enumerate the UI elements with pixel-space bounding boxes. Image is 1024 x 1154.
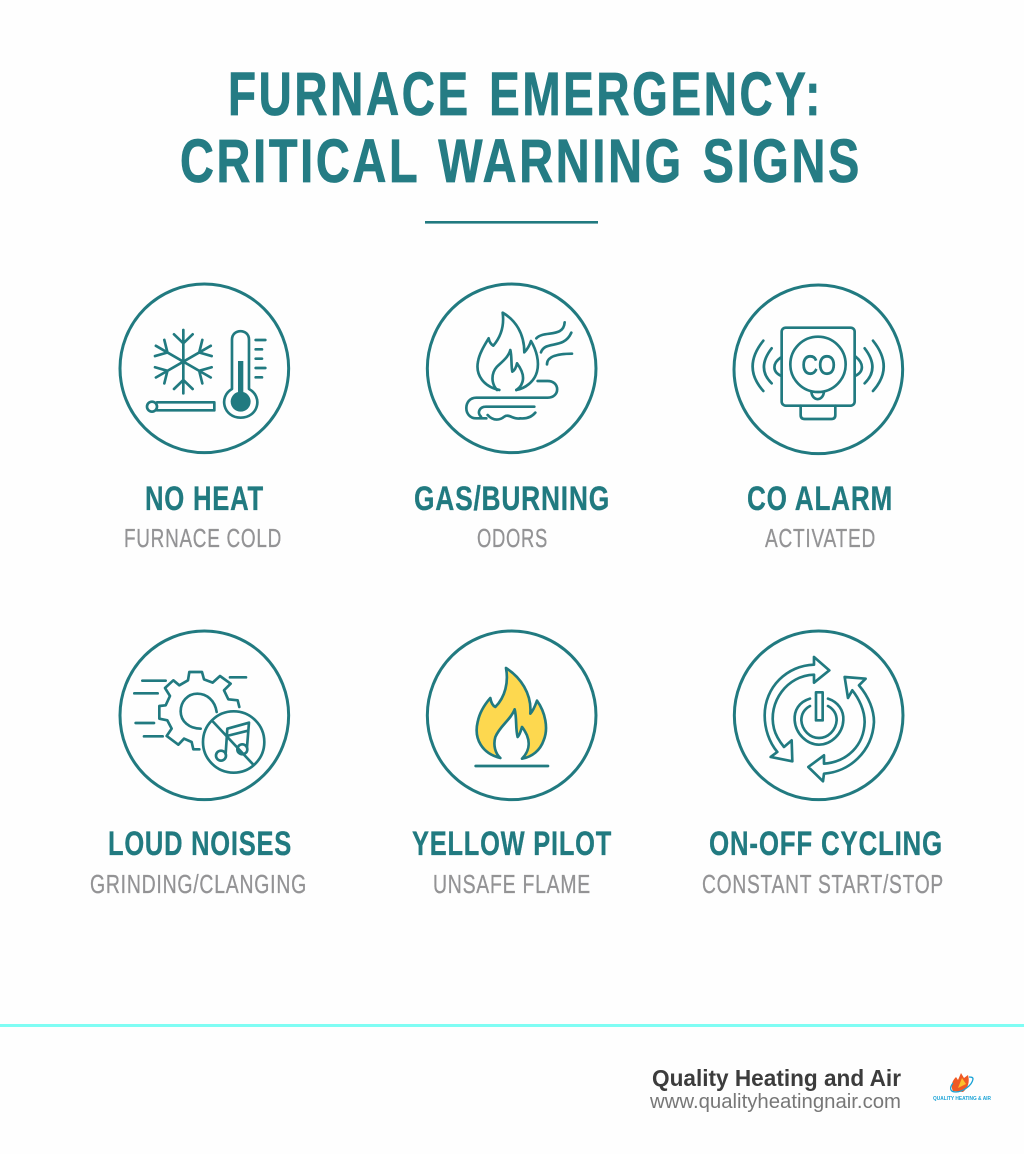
footer logo: QUALITY HEATING & AIR [933,1096,991,1102]
heading: co alarm: CO ALARM [747,480,893,518]
icon: snowflake and thermometer [120,284,289,453]
subtext: grinding/clanging: GRINDING/CLANGING [90,869,307,899]
panel: on-off cycling [702,631,944,899]
subtext: unsafe flame: UNSAFE FLAME [433,869,591,899]
panel: loud noises [90,631,307,899]
icon: gear with crossed music note [120,631,289,800]
heading: gas/burning: GAS/BURNING [414,480,610,518]
heading: yellow pilot: YELLOW PILOT [412,825,612,863]
footer: company name and website [649,1065,901,1113]
subtext: constant start/stop: CONSTANT START/STOP [702,869,944,899]
subtext: odors: ODORS [477,523,548,553]
panel: yellow pilot [412,631,612,899]
icon: carbon monoxide alarm [734,285,903,454]
title [180,60,862,195]
subtext: furnace cold: FURNACE COLD [124,523,282,553]
title: FURNACE EMERGENCY: [228,60,823,128]
heading: no heat: NO HEAT [145,480,264,518]
footer: company name and website: Quality Heating and Air [652,1065,901,1091]
footer: company name and website: www.qualityheatingnair.com [649,1091,901,1113]
panel: co alarm [734,285,903,553]
icon: power symbol with cycling arrows [734,631,903,800]
icon: flame with odor wisps [427,284,596,453]
footer logo [933,1073,991,1102]
panel: no heat [120,284,289,553]
icon: carbon monoxide alarm: CO [801,349,836,380]
subtext: activated: ACTIVATED [765,523,876,553]
heading: loud noises: LOUD NOISES [108,825,292,863]
icon: yellow flame [427,631,596,800]
heading: on-off cycling: ON-OFF CYCLING [709,825,943,863]
panel: gas or burning odors [414,284,610,553]
